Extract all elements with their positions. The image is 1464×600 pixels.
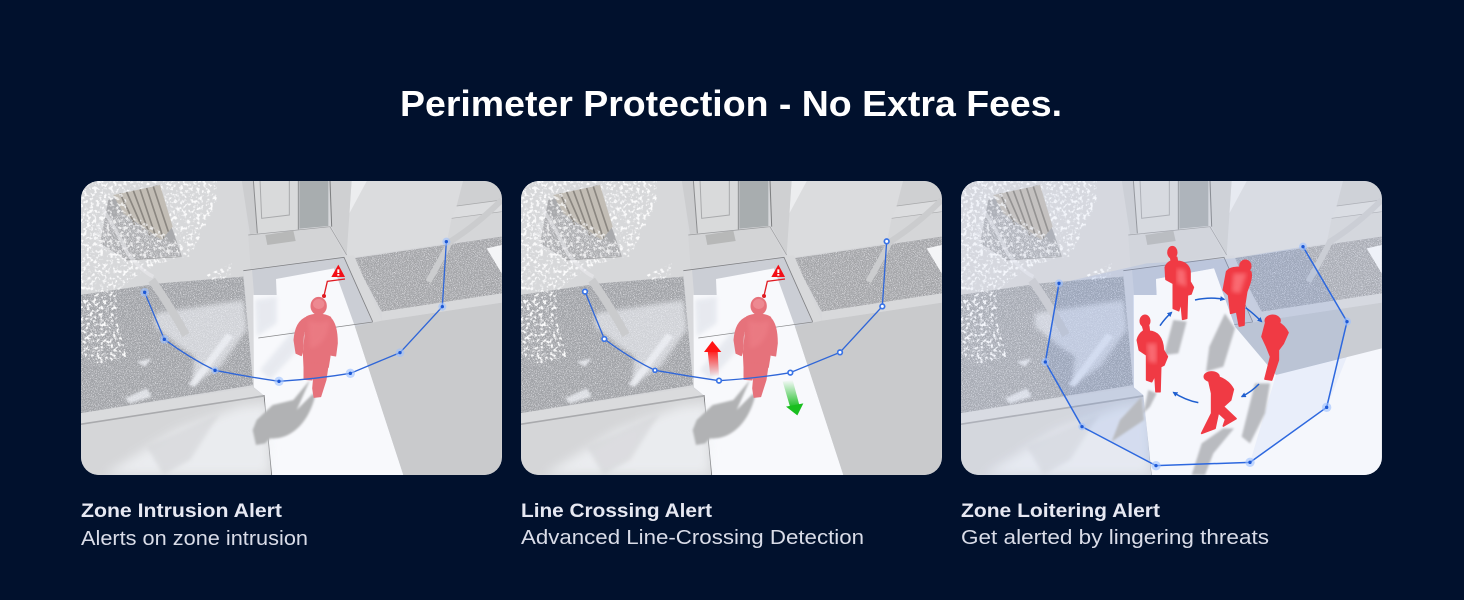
zone line with nodes	[1041, 243, 1351, 470]
panel: line crossing image	[521, 181, 942, 475]
zone fill	[1045, 247, 1347, 466]
person with alert	[294, 265, 345, 397]
title: Perimeter Protection - No Extra Fees.	[400, 83, 1062, 124]
panel: zone loitering image	[961, 181, 1382, 475]
circulating arrows	[1160, 298, 1262, 403]
caption: zone intrusion	[81, 501, 308, 550]
caption: zone intrusion: Zone Intrusion Alert	[81, 501, 283, 522]
arrow: red up	[704, 341, 721, 377]
figure shadows	[1112, 313, 1270, 475]
caption: line crossing: Line Crossing Alert	[521, 501, 713, 522]
caption: line crossing	[521, 501, 864, 549]
person with alert	[734, 265, 785, 397]
zone line with nodes	[140, 238, 450, 386]
caption: zone loitering	[961, 272, 1342, 549]
caption: line crossing: Advanced Line-Crossing Detection	[521, 527, 864, 549]
caption: zone loitering: Get alerted by lingering threats	[961, 527, 1269, 549]
arrow: green down	[783, 380, 803, 415]
caption: zone loitering: Zone Loitering Alert	[961, 501, 1161, 522]
red figures	[1137, 247, 1288, 433]
caption: zone intrusion: Alerts on zone intrusion	[81, 528, 308, 550]
lit floor	[1134, 268, 1382, 475]
zone line with nodes	[583, 239, 889, 383]
panel: zone intrusion image	[81, 181, 502, 475]
